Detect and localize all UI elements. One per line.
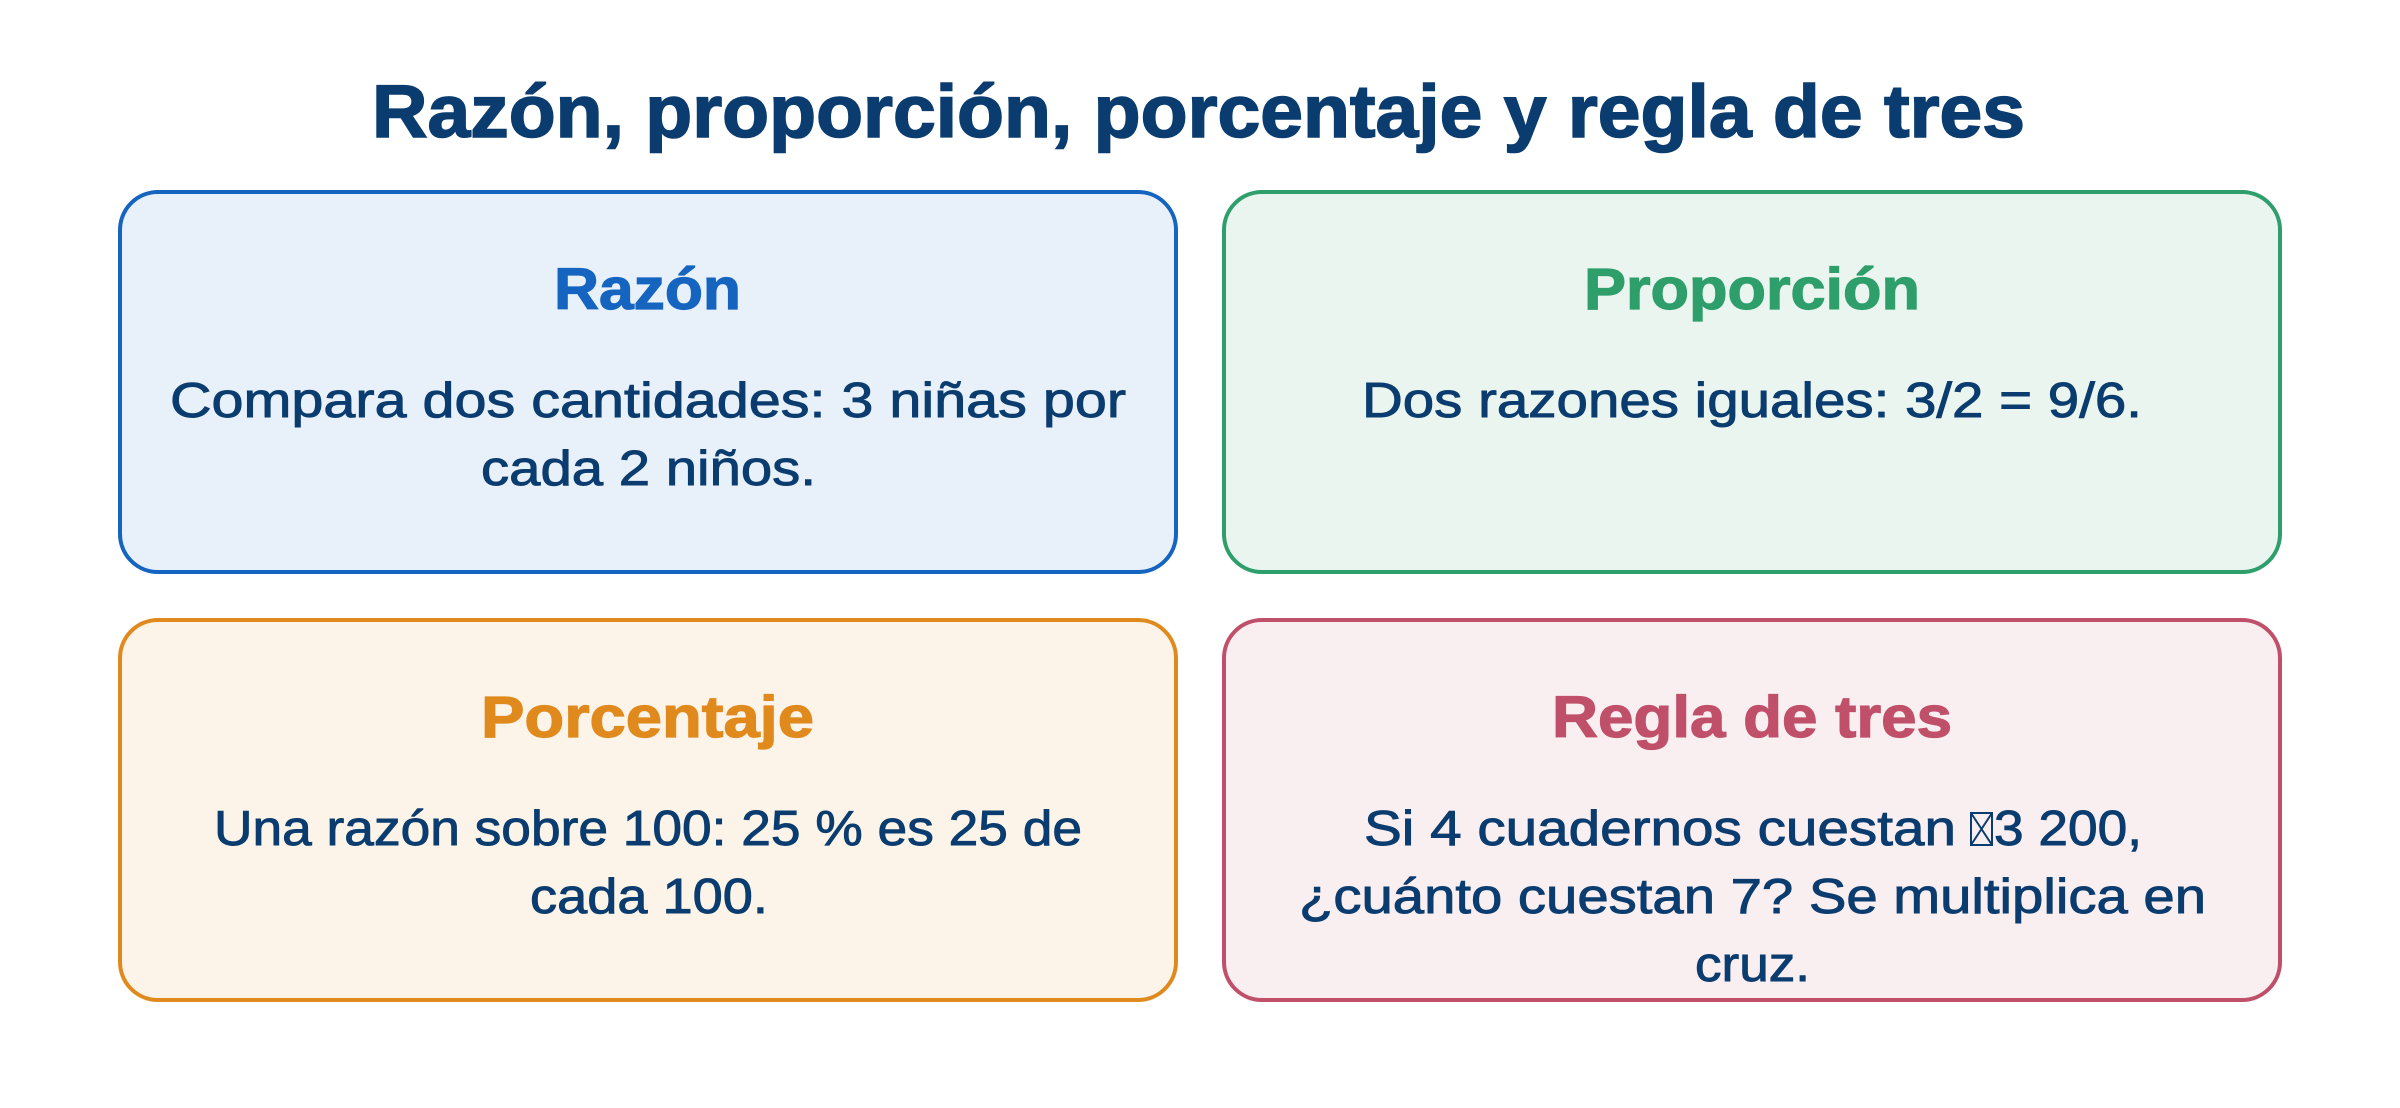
text: proporción description: Dos razones iguales: 3/2 = 9/6.: [1362, 374, 2142, 428]
text: porcentaje description: [214, 802, 1082, 924]
icon: missing glyph box: [1971, 813, 1992, 845]
heading: porcentaje: Porcentaje: [481, 685, 814, 750]
title: Razón, proporción, porcentaje y regla de tres: [372, 70, 2025, 153]
panel: porcentaje: [120, 620, 1176, 1000]
text: regla de tres description: 3 200,: [1994, 802, 2142, 856]
text: razón description: [170, 374, 1126, 496]
panel: proporción: [1224, 192, 2280, 572]
text: regla de tres description: ¿cuánto cuestan 7? Se multiplica en: [1299, 870, 2206, 924]
text: porcentaje description: cada 100.: [530, 870, 768, 924]
heading: razón: Razón: [554, 257, 741, 322]
card background: [120, 192, 1176, 572]
card background: [1224, 620, 2280, 1000]
heading: proporción: Proporción: [1584, 257, 1920, 322]
text: regla de tres description: Si 4 cuadernos cuestan: [1364, 802, 1956, 856]
text: regla de tres description: cruz.: [1695, 938, 1810, 992]
text: razón description: cada 2 niños.: [481, 442, 816, 496]
panel: razón: [120, 192, 1176, 572]
text: razón description: Compara dos cantidades: 3 niñas por: [170, 374, 1126, 428]
card background: [1224, 192, 2280, 572]
text: porcentaje description: Una razón sobre 100: 25 % es 25 de: [214, 802, 1082, 856]
text: regla de tres description: [1299, 802, 2206, 992]
card background: [120, 620, 1176, 1000]
panel: regla de tres: [1224, 620, 2280, 1000]
heading: regla de tres: Regla de tres: [1552, 685, 1952, 750]
